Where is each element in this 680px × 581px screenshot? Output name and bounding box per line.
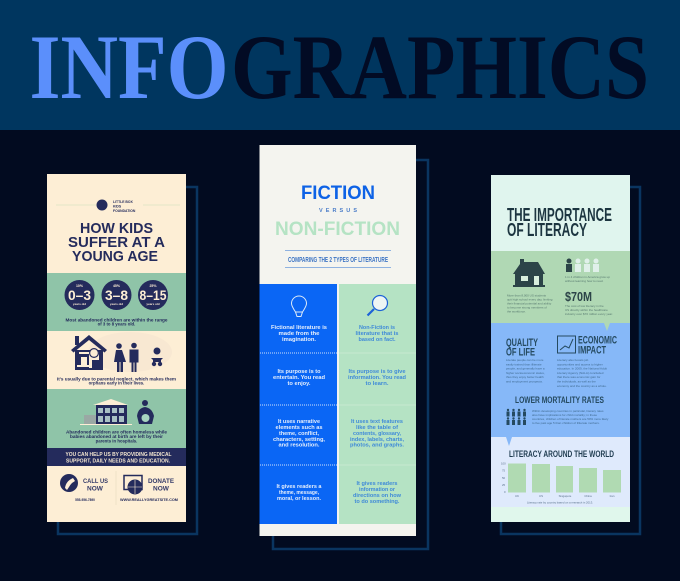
column: non-fiction: information. You read xyxy=(348,375,406,381)
column: non-fiction: to learn. xyxy=(366,381,389,387)
section: quality and impact: thus they enjoy better health xyxy=(506,375,544,379)
section: age stats: 0–3 xyxy=(68,288,91,303)
column: fiction: entertain. You read xyxy=(273,375,325,381)
heading: OF LITERACY xyxy=(507,220,587,240)
bar chart: Literacy rate by country based on a research in 2013. xyxy=(527,500,593,504)
section: age stats: 10% xyxy=(76,284,84,288)
heading: fiction: FICTION xyxy=(301,182,375,204)
column: non-fiction xyxy=(339,284,416,524)
section: quality and impact: countries, children of literate mothers are 50% more likely xyxy=(532,417,609,421)
section: quality and impact: also have implications for child mortality; in these xyxy=(532,413,597,417)
section: quality and impact: people, and generally have a xyxy=(506,367,545,371)
section: quality and impact: Literate people can be more xyxy=(506,358,544,362)
section: quality and impact: education. In 2009, the National Adult xyxy=(557,367,607,371)
help banner xyxy=(47,448,186,466)
icon: parents xyxy=(114,343,138,372)
column: non-fiction: literature that is xyxy=(356,331,399,337)
section: quality and impact: easily trained than illiterate xyxy=(506,362,542,366)
column: fiction: It gives readers a xyxy=(276,484,322,490)
section: statistics: More than 8,000 US students xyxy=(507,294,547,298)
call to action: DONATE xyxy=(148,478,175,485)
section: quality and impact: higher socioeconomic status, xyxy=(506,371,545,375)
icon: building xyxy=(80,399,132,425)
column: fiction: Its purpose is to xyxy=(278,369,320,375)
section: quality and impact: opportunities and access to higher xyxy=(557,362,603,366)
heading: HOW KIDS xyxy=(80,220,153,237)
section: statistics: 1 in 4 children in America grow up xyxy=(565,275,610,279)
column: fiction: imagination. xyxy=(282,337,317,343)
help banner: YOU CAN HELP US BY PROVIDING MEDICAL xyxy=(66,452,172,458)
bar chart: 100 xyxy=(501,462,506,466)
icon: house xyxy=(71,335,107,370)
bar chart: China xyxy=(584,494,592,498)
section: quality and impact: Within developing countries in particular, literacy rates xyxy=(532,409,604,413)
logo header: KIDS xyxy=(113,204,122,208)
column: non-fiction: index, labels, charts, xyxy=(350,437,405,443)
column: non-fiction: Its purpose is to give xyxy=(348,369,406,375)
section: quality and impact: economy and the country as a whole. xyxy=(557,384,607,388)
column: fiction xyxy=(260,284,337,524)
section: age stats xyxy=(47,273,186,331)
section: age stats: 45% xyxy=(113,284,121,288)
heading xyxy=(507,205,612,240)
column: non-fiction: based on fact. xyxy=(358,337,396,343)
bar chart: Singapore xyxy=(559,494,572,498)
panel: how kids suffer xyxy=(47,174,186,522)
column: fiction: theme, conflict, xyxy=(279,431,320,437)
panel: fiction versus non-fiction xyxy=(260,145,416,536)
icon: pregnant woman xyxy=(137,400,154,424)
bar chart: 25 xyxy=(502,483,506,487)
heading: lower mortality: LOWER MORTALITY RATES xyxy=(515,395,604,406)
section: neglect: It's usually due to parental neglect, which makes them xyxy=(57,376,176,382)
bar chart: 75 xyxy=(502,468,506,472)
panel: importance of literacy xyxy=(491,175,630,522)
section: quality and impact: that there was economic gain for xyxy=(557,375,600,379)
heading: YOUNG AGE xyxy=(72,248,158,265)
section: statistics xyxy=(491,251,630,323)
section: literacy chart xyxy=(491,437,630,522)
column: non-fiction: It uses text features xyxy=(351,419,403,425)
section: neglect: orphans early in their lives. xyxy=(89,380,144,386)
section: quality and impact: QUALITY xyxy=(506,337,538,349)
section: quality and impact: Literacy Agency (NALA) concluded xyxy=(557,371,604,375)
section: statistics: to become strong members of xyxy=(507,306,547,310)
bar chart: US xyxy=(539,494,543,498)
section: age stats: 8–15 xyxy=(140,288,167,303)
heading: non-fiction: NON-FICTION xyxy=(275,219,400,240)
column: fiction: Fictional literature is xyxy=(271,325,327,331)
section: quality and impact: IMPACT xyxy=(578,344,606,356)
title: INFO xyxy=(30,16,228,118)
icon: magnifier xyxy=(368,296,388,316)
section: age stats: years old xyxy=(73,302,86,306)
column: non-fiction: like the table of xyxy=(356,425,398,431)
heading: SUFFER AT A xyxy=(68,234,165,251)
header banner xyxy=(0,0,680,130)
section: statistics: industry over $70 million every year. xyxy=(565,312,613,316)
section: age stats: Most abandoned children are within the range xyxy=(66,318,168,322)
section: quality and impact: ECONOMIC xyxy=(578,334,617,346)
call to action xyxy=(60,471,178,505)
subtitle: COMPARING THE 2 TYPES OF LITERATURE xyxy=(288,257,388,264)
call to action: NOW xyxy=(153,486,170,492)
call to action: WWW.REALLYGREATSITE.COM xyxy=(120,498,178,502)
section: age stats: years old xyxy=(110,302,123,306)
bar chart: 0 xyxy=(504,490,506,494)
section: statistics: their financial potential and ability xyxy=(507,302,552,306)
column: non-fiction: directions on how xyxy=(353,493,402,499)
column: non-fiction: contents, glossary, xyxy=(353,431,402,437)
subtitle xyxy=(285,250,391,268)
column: fiction: characters, setting, xyxy=(273,437,326,443)
section: homeless: Abandoned children are often homeless while xyxy=(66,430,168,434)
stat: $70M: $70M xyxy=(565,290,592,304)
column: non-fiction: Non-Fiction is xyxy=(359,325,395,331)
section: homeless: parents in hospitals. xyxy=(96,438,137,444)
icon: people grid xyxy=(506,409,526,425)
icon: baby xyxy=(151,348,163,366)
title xyxy=(30,16,649,118)
section: age stats: of 3 to 8 years old. xyxy=(98,322,135,326)
column: fiction: It uses narrative xyxy=(278,419,320,425)
section: quality and impact: OF LIFE xyxy=(506,346,535,358)
section: homeless: babies abandoned at birth are left by their xyxy=(70,434,163,439)
logo header: FOUNDATION xyxy=(113,209,136,213)
section: quality and impact xyxy=(491,323,630,437)
section: statistics: quit high school every day, limiting xyxy=(507,298,553,302)
section: quality and impact: the individuals, as well as the xyxy=(557,380,596,384)
logo header xyxy=(56,200,180,213)
icon: house xyxy=(513,259,545,287)
column: fiction: moral, or lesson. xyxy=(277,496,322,502)
section: age stats: 25% xyxy=(149,284,157,288)
bar chart xyxy=(501,462,621,504)
section: statistics: US directly within the healthcare xyxy=(565,308,608,312)
section: statistics: without learning how to read. xyxy=(565,279,604,283)
column: non-fiction: It gives readers xyxy=(356,481,398,487)
icon: light bulb xyxy=(292,296,306,316)
heading xyxy=(68,220,165,265)
column: fiction: and resolution. xyxy=(278,442,320,448)
versus: VERSUS xyxy=(319,208,357,214)
section: neglect xyxy=(57,332,176,386)
call to action: NOW xyxy=(87,486,104,492)
section: statistics: the workforce. xyxy=(507,310,526,314)
column: fiction: made from the xyxy=(278,331,320,337)
section: homeless xyxy=(47,389,186,448)
bar chart: UK xyxy=(515,494,519,498)
icon: donate globe xyxy=(124,476,142,494)
help banner: SUPPORT, DAILY NEEDS AND EDUCATION. xyxy=(66,458,171,464)
section: quality and impact: to live past age 5 than children of illiterate mothers. xyxy=(532,421,600,425)
card outlines xyxy=(58,160,640,549)
heading: THE IMPORTANCE xyxy=(507,205,612,225)
icon: phone xyxy=(60,474,78,492)
bar chart: Iran xyxy=(610,494,615,498)
column: non-fiction: photos, and graphs. xyxy=(350,442,405,448)
column: non-fiction: information or xyxy=(359,487,395,493)
call to action: 555-956-7890 xyxy=(75,498,95,502)
logo header: LITTLE BOX xyxy=(113,200,134,204)
section: quality and impact: and employment prospects. xyxy=(506,380,543,384)
bar chart: 50 xyxy=(502,476,506,480)
section: quality and impact: Literacy also boosts job xyxy=(557,358,589,362)
call to action: CALL US xyxy=(83,478,109,485)
icon: chart xyxy=(558,336,576,353)
chart heading: LITERACY AROUND THE WORLD xyxy=(509,449,614,460)
section: age stats: years old xyxy=(146,302,160,306)
section: statistics: The cost of low literacy in the xyxy=(565,304,604,308)
column: non-fiction: to do something. xyxy=(354,499,400,505)
column: fiction: theme, message, xyxy=(279,490,320,496)
icon: children row xyxy=(566,258,599,272)
column: fiction: to enjoy. xyxy=(288,381,311,387)
section: age stats: 3–8 xyxy=(105,288,128,303)
column: fiction: elements such as xyxy=(276,425,323,431)
